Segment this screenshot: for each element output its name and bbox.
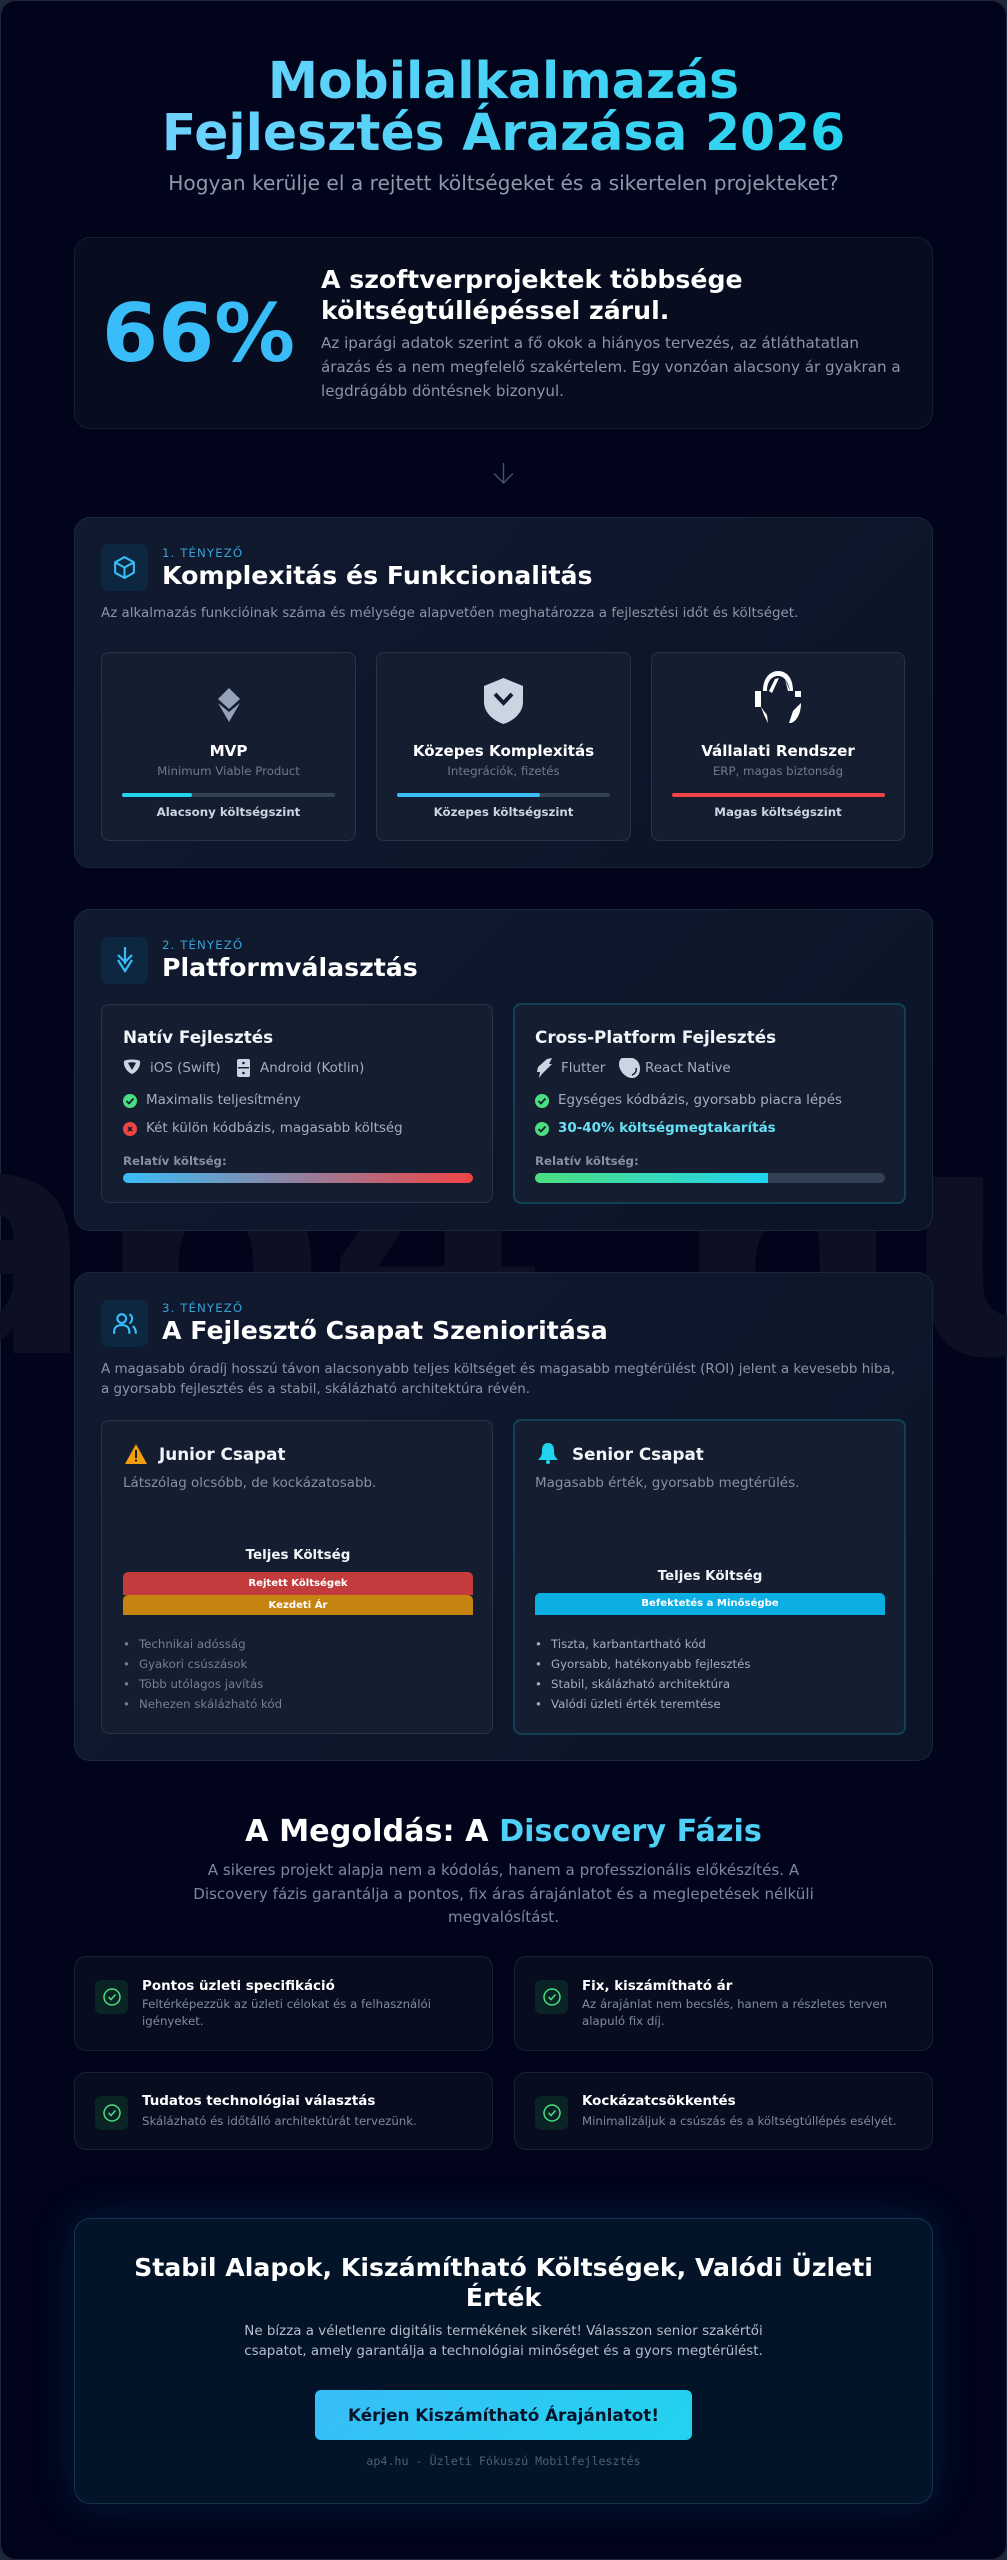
benefit list: Stabil, skálázható architektúra: [551, 1677, 730, 1691]
risk list: Több utólagos javítás: [139, 1677, 263, 1691]
icon: check circle: [535, 1980, 568, 2014]
icon: cross: [123, 1122, 137, 1136]
card: cross-platform: [513, 1003, 906, 1204]
icon: check circle: [535, 2096, 568, 2130]
panel: factor 3 team seniority: [74, 1272, 933, 1761]
card: enterprise: [651, 652, 905, 841]
icon: users: [101, 1300, 148, 1347]
card title: MVP: [210, 742, 247, 760]
arrow down: [494, 463, 514, 484]
cta text: [244, 2324, 763, 2359]
benefit text: Minimalizáljuk a csúszás és a költségtúllépés esélyét.: [582, 2114, 896, 2128]
card: senior: [513, 1419, 906, 1735]
stat heading: [321, 265, 743, 325]
panel: factor 2 platform: [74, 909, 933, 1231]
factor heading: Komplexitás és Funkcionalitás: [162, 561, 593, 590]
card title: Junior Csapat: [159, 1444, 286, 1464]
section: the solution: [74, 1814, 933, 2150]
risk list: •: [123, 1657, 130, 1671]
tag text: Android (Kotlin): [260, 1061, 364, 1076]
tag: React Native: [619, 1058, 731, 1078]
cost bar: [122, 793, 335, 797]
factor description: [101, 1362, 895, 1397]
title: Fejlesztés Árazása 2026: [162, 103, 845, 162]
benefit text: Skálázható és időtálló architektúrát tervezünk.: [142, 2114, 417, 2128]
risk list: •: [123, 1637, 130, 1651]
panel: 66% statistic: [74, 237, 933, 429]
icon: apple: [124, 1060, 140, 1074]
benefit list: [535, 1637, 750, 1711]
factor description: a gyorsabb fejlesztés és a stabil, skálázható architektúra révén.: [101, 1382, 530, 1397]
tag: Flutter: [537, 1058, 606, 1078]
icon: check: [535, 1094, 549, 1108]
cost label: Közepes költségszint: [434, 805, 573, 819]
segment: initial price: Kezdeti Ár: [269, 1600, 327, 1611]
cost bar: [397, 793, 610, 797]
risk list: •: [123, 1697, 130, 1711]
benefit list: Tiszta, karbantartható kód: [551, 1637, 706, 1651]
cost label: Relatív költség:: [123, 1154, 227, 1168]
benefit list: •: [535, 1677, 542, 1691]
stat description: Az iparági adatok szerint a fő okok a hiányos tervezés, az átláthatatlan: [321, 334, 859, 352]
icon: warning: [125, 1444, 147, 1464]
benefit list: •: [535, 1657, 542, 1671]
icon: flutter: [537, 1058, 552, 1078]
stack label: Teljes Költség: [658, 1569, 762, 1584]
item text: Egységes kódbázis, gyorsabb piacra lépés: [558, 1093, 842, 1108]
tag text: Flutter: [561, 1061, 605, 1076]
panel: factor 1 complexity: [74, 517, 933, 868]
risk list: Technikai adósság: [139, 1637, 246, 1651]
icon: cube: [101, 544, 148, 591]
cost label: Relatív költség:: [535, 1154, 639, 1168]
stat description: legdrágább döntésnek bizonyul.: [321, 382, 564, 400]
footer: ap4.hu - Üzleti Fókuszú Mobilfejlesztés: [366, 2454, 641, 2468]
tag: Android: [237, 1059, 364, 1077]
icon: download platform: [101, 937, 148, 984]
item text: Két külön kódbázis, magasabb költség: [146, 1121, 403, 1136]
tag text: React Native: [645, 1061, 731, 1076]
segment: investment in quality: Befektetés a Minőségbe: [641, 1598, 779, 1609]
benefit card: specification: [74, 1956, 493, 2051]
stat description: árazás és a nem megfelelő szakértelem. Egy vonzóan alacsony ár gyakran a: [321, 358, 901, 376]
icon: bell: [538, 1443, 558, 1464]
benefit title: Fix, kiszámítható ár: [582, 1979, 732, 1994]
tag: iOS: [124, 1060, 221, 1076]
item text: 30-40% költségmegtakarítás: [558, 1121, 776, 1136]
solution description: megvalósítást.: [448, 1908, 559, 1926]
card title: Közepes Komplexitás: [413, 742, 594, 760]
card: MVP: [101, 652, 356, 841]
cost bar: [123, 1173, 473, 1183]
benefit text: [582, 1997, 887, 2028]
cta heading: Érték: [466, 2283, 541, 2312]
big number: 66%: [102, 287, 295, 381]
solution description: [193, 1861, 814, 1926]
cost stack: [123, 1548, 473, 1615]
benefit list: Valódi üzleti érték teremtése: [551, 1697, 721, 1711]
title: Mobilalkalmazás: [268, 51, 739, 110]
cost label: Magas költségszint: [714, 805, 842, 819]
benefit title: Kockázatcsökkentés: [582, 2094, 736, 2109]
factor label: 1. TÉNYEZŐ: [162, 546, 243, 560]
card title: Vállalati Rendszer: [701, 742, 855, 760]
stack label: Teljes Költség: [246, 1548, 350, 1563]
factor heading: Platformválasztás: [162, 953, 418, 982]
segment: initial price: [123, 1595, 473, 1615]
cost bar: [535, 1173, 885, 1183]
solution heading: A Megoldás: A Discovery Fázis: [245, 1814, 762, 1849]
card: junior: [101, 1420, 493, 1734]
benefit text: alapuló fix díj.: [582, 2014, 665, 2028]
card title: Natív Fejlesztés: [123, 1027, 273, 1047]
card title: Senior Csapat: [572, 1444, 704, 1464]
cta text: Ne bízza a véletlenre digitális termékének sikerét! Válasszon senior szakértői: [244, 2324, 763, 2339]
pro item: [535, 1093, 842, 1108]
cta button: Kérjen Kiszámítható Árajánlatot!: [348, 2405, 659, 2425]
header: [162, 51, 845, 195]
benefit card: fixed price: [514, 1956, 933, 2051]
card: medium: [376, 652, 631, 841]
icon: shield: [484, 678, 523, 724]
cta button: [315, 2390, 692, 2440]
risk list: [123, 1637, 282, 1711]
factor description: Az alkalmazás funkcióinak száma és mélysége alapvetően meghatározza a fejlesztési időt és költséget.: [101, 606, 798, 621]
pro item highlighted: [535, 1121, 776, 1136]
cost bar: [672, 793, 885, 797]
segment: hidden costs: Rejtett Költségek: [248, 1578, 348, 1589]
card title: Cross-Platform Fejlesztés: [535, 1027, 776, 1047]
icon: check: [535, 1122, 549, 1136]
segment: investment in quality: [535, 1593, 885, 1615]
con item: [123, 1121, 403, 1136]
stat description: [321, 334, 901, 400]
solution description: A sikeres projekt alapja nem a kódolás, hanem a professzionális előkészítés. A: [208, 1861, 799, 1879]
cost stack: [535, 1569, 885, 1615]
cta heading: [134, 2252, 873, 2312]
benefit text: [142, 1997, 431, 2028]
benefit list: Gyorsabb, hatékonyabb fejlesztés: [551, 1657, 750, 1671]
benefit title: Pontos üzleti specifikáció: [142, 1979, 335, 1994]
pro item: [123, 1093, 301, 1108]
risk list: •: [123, 1677, 130, 1691]
cost label: Alacsony költségszint: [157, 805, 300, 819]
risk list: Nehezen skálázható kód: [139, 1697, 282, 1711]
tag text: iOS (Swift): [150, 1061, 221, 1076]
stat heading: A szoftverprojektek többsége: [321, 265, 743, 294]
panel: call to action: [74, 2218, 933, 2504]
benefit list: •: [535, 1697, 542, 1711]
icon: headset: [755, 671, 801, 723]
benefit title: Tudatos technológiai választás: [142, 2094, 375, 2109]
icon: react: [619, 1058, 640, 1078]
benefit list: •: [535, 1637, 542, 1651]
icon: check circle: [95, 2096, 128, 2130]
benefit text: igényeket.: [142, 2014, 204, 2028]
card subtitle: Integrációk, fizetés: [447, 764, 560, 778]
icon: check circle: [95, 1980, 128, 2014]
card: native: [101, 1004, 493, 1203]
factor description: A magasabb óradíj hosszú távon alacsonyabb teljes költséget és magasabb megtérülést (ROI) jelent a kevesebb hiba,: [101, 1362, 895, 1377]
risk list: Gyakori csúszások: [139, 1657, 247, 1671]
card subtitle: Magasabb érték, gyorsabb megtérülés.: [535, 1476, 799, 1491]
solution description: Discovery fázis garantálja a pontos, fix áras árajánlatot és a meglepetések nélküli: [193, 1884, 814, 1902]
icon: check: [123, 1094, 137, 1108]
icon: phone: [237, 1059, 250, 1077]
card subtitle: Látszólag olcsóbb, de kockázatosabb.: [123, 1476, 376, 1491]
item text: Maximalis teljesítmény: [146, 1093, 301, 1108]
card subtitle: ERP, magas biztonság: [713, 764, 843, 778]
icon: gem: [218, 688, 240, 722]
title: [0, 55, 1007, 159]
benefit card: technology: [74, 2072, 493, 2150]
benefit text: Az árajánlat nem becslés, hanem a részletes terven: [582, 1997, 887, 2011]
segment: hidden costs: [123, 1572, 473, 1595]
card subtitle: Minimum Viable Product: [157, 764, 300, 778]
benefit card: risk reduction: [514, 2072, 933, 2150]
cta heading: Stabil Alapok, Kiszámítható Költségek, Valódi Üzleti: [134, 2253, 873, 2282]
factor heading: A Fejlesztő Csapat Szenioritása: [162, 1316, 608, 1345]
cta text: csapatot, amely garantálja a technológiai minőséget és a gyors megtérülést.: [244, 2344, 763, 2359]
stat heading: költségtúllépéssel zárul.: [321, 296, 669, 325]
factor label: 3. TÉNYEZŐ: [162, 1301, 243, 1315]
benefit text: Feltérképezzük az üzleti célokat és a felhasználói: [142, 1997, 431, 2011]
subtitle: Hogyan kerülje el a rejtett költségeket és a sikertelen projekteket?: [168, 171, 839, 195]
factor label: 2. TÉNYEZŐ: [162, 938, 243, 952]
